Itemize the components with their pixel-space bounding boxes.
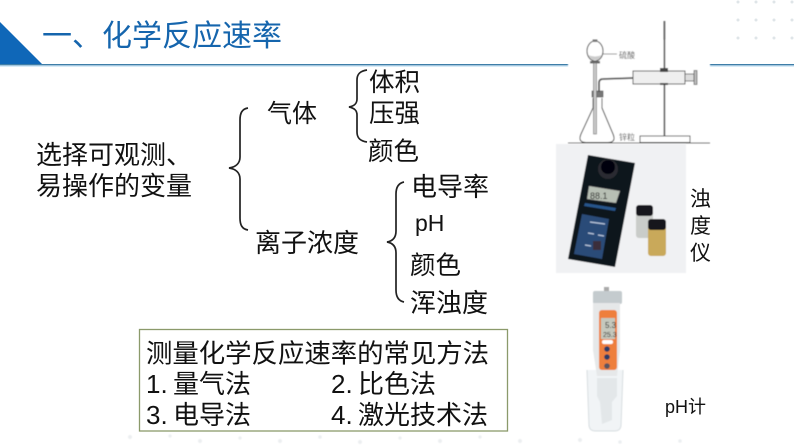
stopper: [592, 91, 603, 97]
meter screen: [587, 186, 620, 203]
turbidimeter label: 浊: [690, 188, 711, 211]
pH meter image: [587, 287, 623, 431]
meter blue band: [584, 203, 616, 211]
ion concentration branch label: 离子浓度: [255, 228, 359, 258]
method 1: 1.: [146, 369, 168, 399]
box heading: 测量化学反应速率的常见方法: [146, 338, 489, 368]
method 4: 4.: [331, 400, 353, 430]
apparatus image: gas syringe setup: 硫酸: [619, 50, 635, 60]
ion variables list: 颜色: [410, 252, 461, 280]
method 1: 量气法: [173, 369, 251, 399]
stand: [664, 21, 665, 136]
ion brace: [387, 182, 404, 302]
syringe: [633, 71, 685, 84]
meter cap: [598, 159, 618, 179]
pen cap: [593, 291, 622, 304]
pH meter image: 25.3: [603, 332, 617, 339]
decorative dots: [736, 0, 794, 40]
meter body: [568, 155, 635, 267]
left label: choose observable variable: [36, 140, 192, 201]
turbidimeter label: 度: [690, 215, 711, 238]
ion variables list: 浑浊度: [410, 288, 488, 318]
ion variables list: 电导率: [411, 172, 489, 202]
ion variables list: [410, 172, 489, 318]
vial: clear: [636, 207, 653, 238]
method 3: 3.: [146, 400, 168, 430]
corner triangle: [0, 22, 42, 64]
pen body: [593, 303, 620, 351]
header rule: [0, 64, 794, 67]
vial: amber: [648, 221, 666, 256]
gas variables list: 压强: [369, 100, 420, 128]
gas variables list: 颜色: [368, 138, 419, 166]
table line: [568, 142, 710, 144]
method 3: 电导法: [173, 400, 251, 430]
probe: [597, 378, 617, 424]
pen screen: [601, 318, 615, 339]
ion variables list: pH: [415, 210, 444, 236]
turbidimeter label: [690, 188, 711, 265]
methods box: [140, 330, 508, 431]
orange panel: [599, 310, 617, 370]
delivery tube: [599, 78, 633, 92]
funnel: [587, 41, 603, 61]
title: 一、化学反应速率: [42, 20, 282, 53]
turbidimeter image: 88.1: [590, 191, 608, 201]
left label: choose observable variable: 易操作的变量: [36, 171, 192, 201]
meter keypad: [574, 214, 609, 259]
method 2: 比色法: [358, 369, 436, 399]
pH meter label: pH计: [665, 397, 706, 417]
bottom speckle band: [128, 434, 682, 444]
method 4: 激光技术法: [358, 400, 488, 430]
flask: [580, 98, 614, 142]
beaker: [587, 370, 623, 431]
pH meter image: 5.3: [605, 321, 617, 330]
label: sulfuric acid: [603, 53, 617, 55]
main brace: [229, 108, 248, 230]
gas variables list: [368, 69, 420, 166]
gas brace: [349, 70, 367, 142]
turbidimeter label: 仪: [690, 242, 711, 265]
pen buttons: [602, 340, 613, 344]
turbidimeter image: [556, 144, 686, 273]
gas variables list: 体积: [369, 69, 420, 97]
label: zinc granules: 锌粒: [619, 132, 635, 142]
apparatus image: gas syringe setup: [568, 21, 710, 144]
gas branch label: 气体: [267, 100, 317, 128]
method 2: 2.: [331, 369, 353, 399]
left label: choose observable variable: 选择可观测、: [36, 140, 192, 170]
